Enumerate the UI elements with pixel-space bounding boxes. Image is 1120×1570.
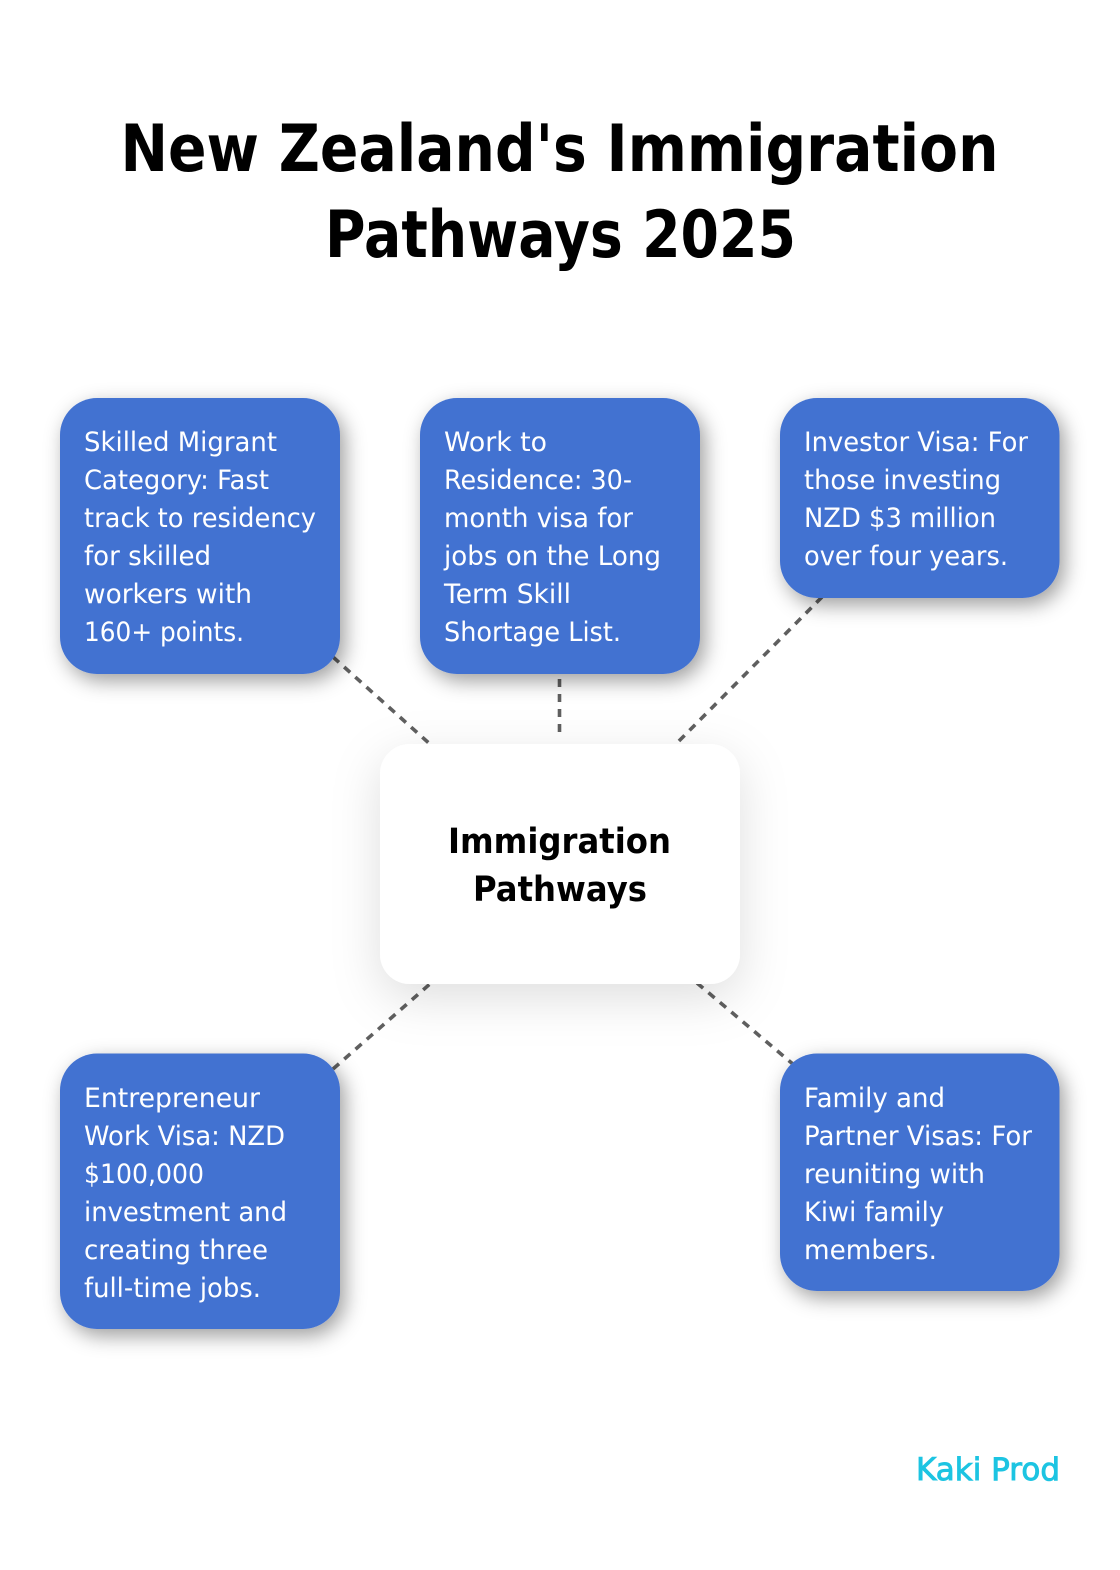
panel: work to residence: Shortage List.: [444, 617, 621, 648]
panel: skilled migrant category: Category: Fast: [84, 465, 269, 496]
panel: investor visa: Investor Visa: For: [804, 427, 1029, 458]
title: Pathways 2025: [325, 198, 796, 273]
connector: family visas to centre: [697, 983, 794, 1065]
panel: family and partner visas: Kiwi family: [804, 1197, 944, 1228]
panel: investor visa: over four years.: [804, 541, 1008, 572]
panel: work to residence: jobs on the Long: [443, 541, 661, 572]
panel: entrepreneur work visa: creating three: [84, 1235, 268, 1266]
panel: work to residence: Work to: [444, 427, 547, 458]
logo: Kaki Prod: Kaki Prod: [916, 1452, 1060, 1488]
panel: work to residence: month visa for: [444, 503, 634, 534]
panel: family and partner visas: [780, 1054, 1060, 1291]
panel: investor visa: those investing: [804, 465, 1001, 496]
panel: work to residence: [420, 398, 700, 674]
panel: entrepreneur work visa: Entrepreneur: [84, 1083, 261, 1114]
panel: family and partner visas: reuniting with: [804, 1159, 985, 1190]
panel: skilled migrant category: 160+ points.: [84, 617, 244, 648]
connector: investor visa to centre: [675, 597, 822, 745]
panel: skilled migrant category: workers with: [84, 579, 252, 610]
panel: entrepreneur work visa: [60, 1054, 340, 1329]
panel: skilled migrant category: track to residency: [84, 503, 316, 534]
panel: investor visa: [780, 398, 1060, 598]
panel: work to residence: Residence: 30-: [444, 465, 632, 496]
panel: family and partner visas: members.: [804, 1235, 937, 1266]
title: New Zealand's Immigration: [120, 112, 998, 187]
panel: family and partner visas: Family and: [804, 1083, 945, 1114]
panel: skilled migrant category: [60, 398, 340, 674]
panel: work to residence: Term Skill: [443, 579, 571, 610]
panel: investor visa: NZD $3 million: [804, 503, 996, 534]
panel: skilled migrant category: Skilled Migrant: [84, 427, 277, 458]
connector: skilled migrant to centre: [333, 657, 431, 745]
panel: family and partner visas: Partner Visas: For: [804, 1121, 1033, 1152]
panel: entrepreneur work visa: Work Visa: NZD: [84, 1121, 285, 1152]
panel: entrepreneur work visa: full-time jobs.: [84, 1273, 261, 1304]
title: [120, 112, 998, 273]
panel: centre node immigration pathways: Immigration: [448, 822, 671, 862]
panel: entrepreneur work visa: $100,000: [84, 1159, 204, 1190]
connector: work to residence to centre: [558, 679, 561, 739]
panel: centre node immigration pathways: Pathways: [473, 870, 647, 910]
panel: skilled migrant category: for skilled: [84, 541, 211, 572]
connector: entrepreneur visa to centre: [333, 983, 431, 1069]
panel: centre node immigration pathways: [380, 744, 740, 984]
panel: entrepreneur work visa: investment and: [84, 1197, 287, 1228]
